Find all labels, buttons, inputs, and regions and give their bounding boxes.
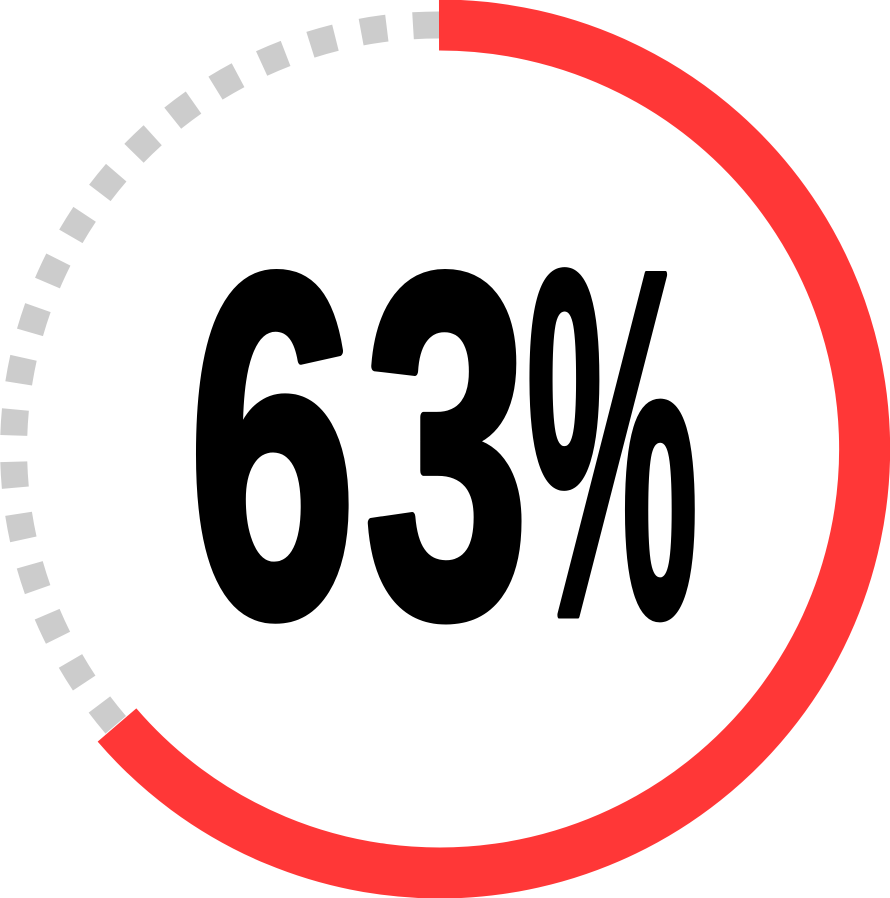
value label: 63% — [188, 167, 699, 720]
value label: 63%: % — [526, 167, 699, 720]
value label: 63%: 3 — [364, 175, 529, 718]
value label: 63%: 6 — [188, 173, 356, 717]
remaining track: dashed grey arc — [14, 25, 439, 733]
progress arc: red — [117, 25, 865, 873]
